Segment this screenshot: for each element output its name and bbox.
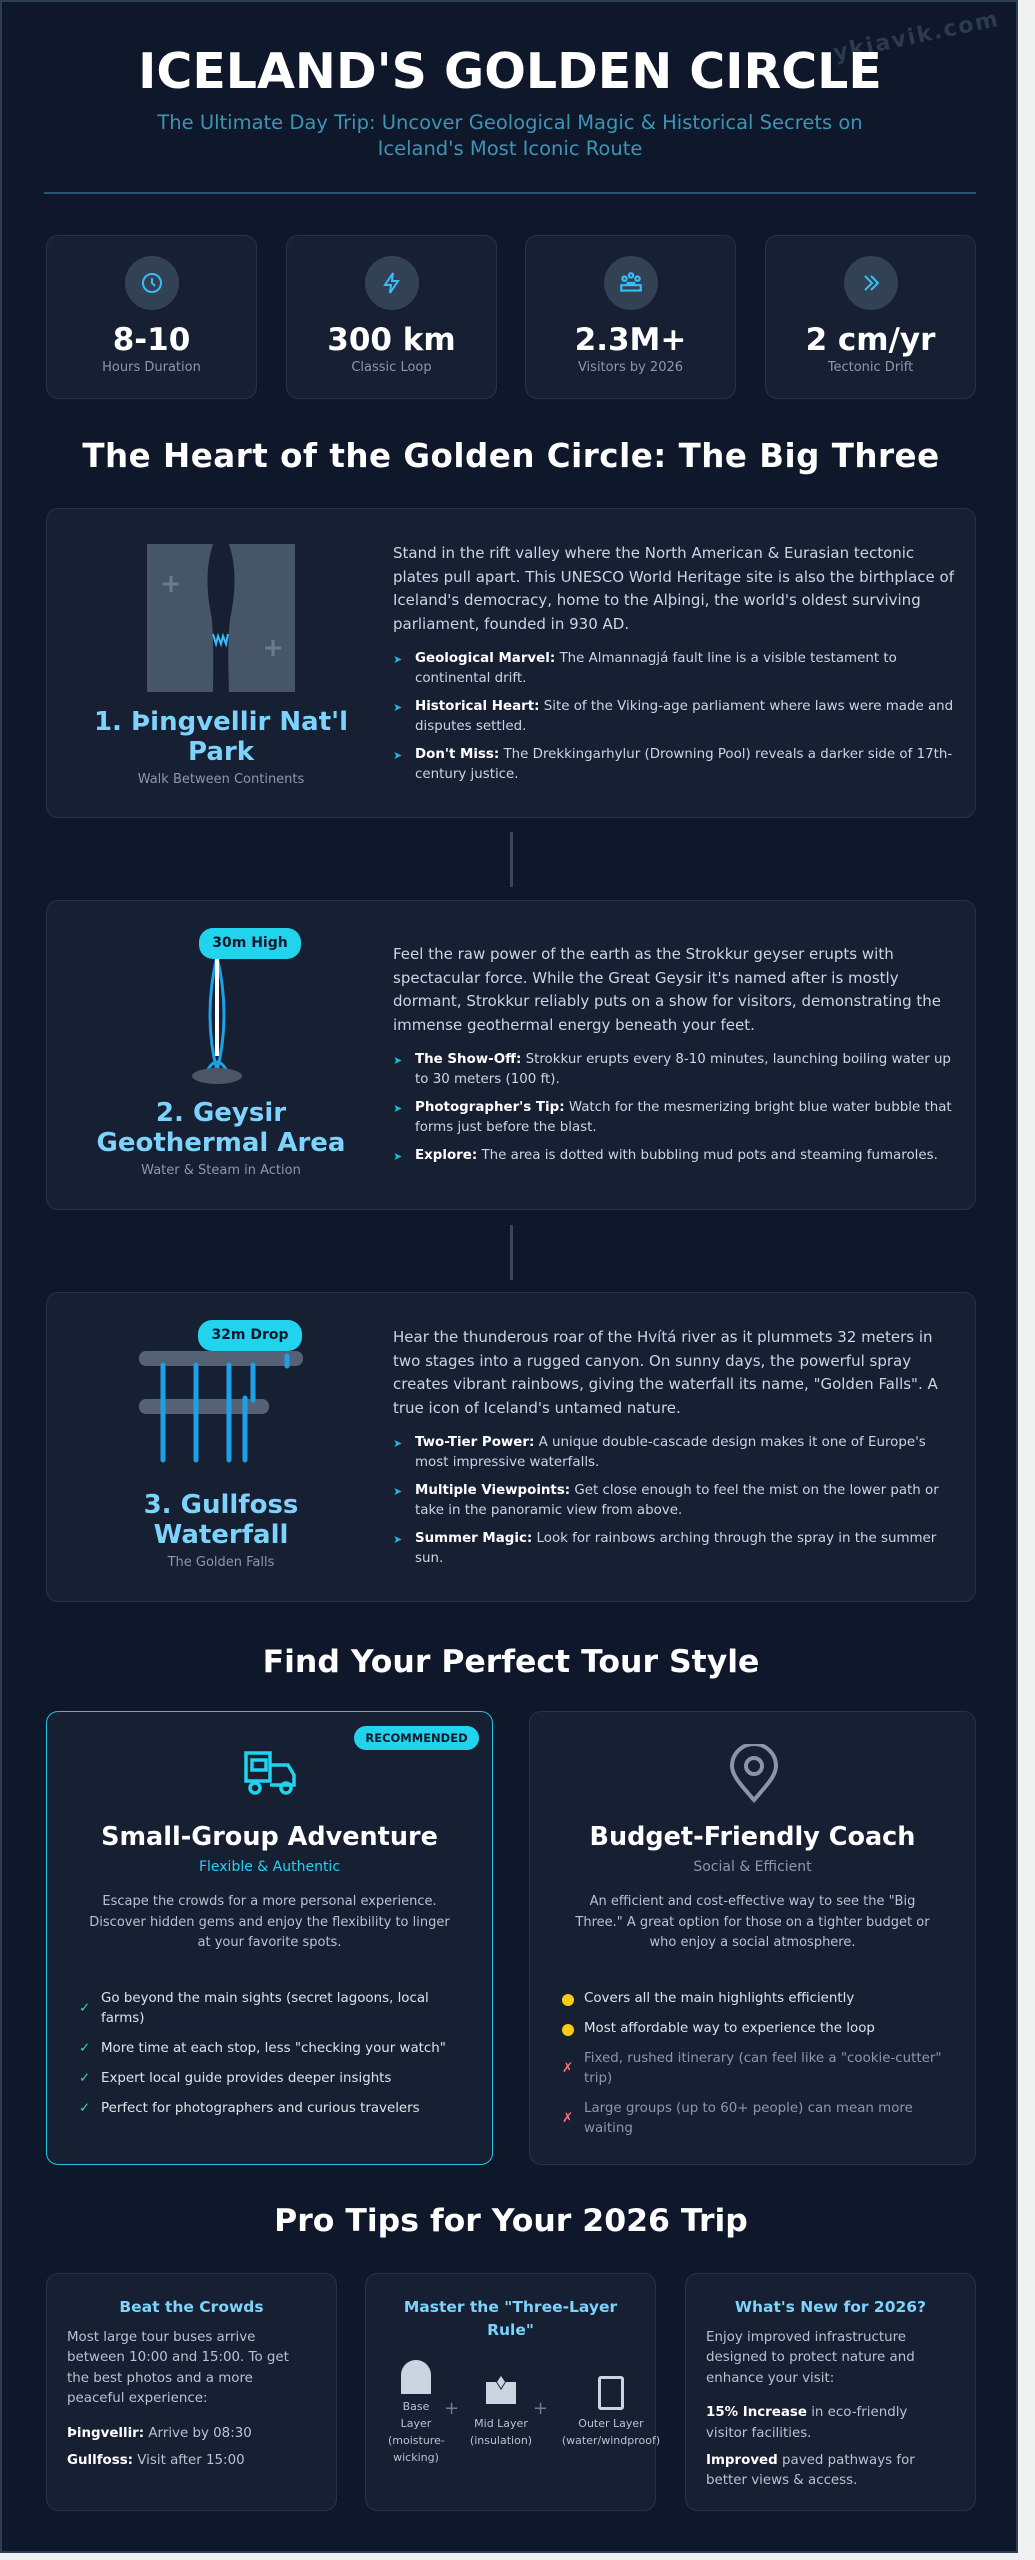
panel: budget coach: Budget-Friendly Coach <box>590 1822 915 1852</box>
panel: three-layer rule: Master the "Three-Layer Rule" <box>404 2298 617 2339</box>
panel: what's new: 15% Increase in eco-friendly visitor facilities. <box>706 2405 907 2441</box>
panel: small-group: ✓ <box>79 2101 90 2116</box>
badge: 30m high <box>199 928 301 959</box>
subtitle: The Ultimate Day Trip: Uncover Geological Magic & Historical Secrets on Iceland's Most Iconic Route <box>157 111 863 160</box>
badge: recommended: RECOMMENDED <box>365 1731 468 1745</box>
stat: visitors <box>525 235 736 399</box>
title: ICELAND'S GOLDEN CIRCLE <box>138 43 882 100</box>
badge: recommended <box>354 1726 479 1750</box>
icon: layers <box>388 2360 660 2464</box>
panel: small-group: Escape the crowds for a more personal experience. Discover hidden gems and enjoy the flexibility to linger at your favorite spots. <box>89 1894 450 1950</box>
text: Don't Miss: The Drekkingarhylur (Drowning Pool) reveals a darker side of 17th-century justice. <box>415 747 952 782</box>
icon: rift <box>147 544 295 692</box>
text: Feel the raw power of the earth as the Strokkur geyser erupts with spectacular force. While the Great Geysir it's named after is mostly dormant, Strokkur reliably puts on a show for visitors, demonstrating the immense geothermal energy beneath your feet. <box>393 945 941 1034</box>
panel: budget coach: Covers all the main highlights efficiently <box>584 1991 854 2006</box>
panel: small-group: ✓ <box>79 2071 90 2086</box>
panel: what's new: What's New for 2026? <box>735 2298 926 2316</box>
title: 2. Geysir Geothermal Area <box>97 1098 345 1158</box>
panel: small-group: More time at each stop, less "checking your watch" <box>101 2041 446 2056</box>
icon: geyser <box>192 959 242 1084</box>
panel: beat the crowds: Beat the Crowds <box>119 2298 264 2316</box>
panel: gullfoss <box>46 1292 976 1602</box>
panel: small-group: ✓ <box>79 2001 90 2016</box>
badge: 32m drop: 32m Drop <box>211 1327 289 1343</box>
icon: vehicles <box>244 1751 296 1795</box>
text: Two-Tier Power: A unique double-cascade design makes it one of Europe's most impressive waterfalls. <box>415 1435 926 1470</box>
panel: beat the crowds: Most large tour buses arrive between 10:00 and 15:00. To get the best photos and a more peaceful experience: <box>67 2330 289 2406</box>
connector <box>510 1225 513 1280</box>
panel: small-group: Go beyond the main sights (secret lagoons, local farms) <box>101 1991 429 2026</box>
panel: small-group: Expert local guide provides deeper insights <box>101 2071 391 2086</box>
stat: distance: 300 km <box>327 322 456 358</box>
text: Multiple Viewpoints: Get close enough to feel the mist on the lower path or take in the panoramic view from above. <box>415 1483 939 1518</box>
heading: pro tips: Pro Tips for Your 2026 Trip <box>274 2203 748 2239</box>
stat: distance: Classic Loop <box>351 360 432 375</box>
panel: beat the crowds: Þingvellir: Arrive by 08:30 <box>67 2426 252 2441</box>
panel: beat the crowds: Gullfoss: Visit after 15:00 <box>67 2453 245 2468</box>
text: Summer Magic: Look for rainbows arching through the spray in the summer sun. <box>415 1531 936 1566</box>
icon: layers: Mid Layer (insulation) <box>470 2417 532 2447</box>
stat: drift <box>765 235 976 399</box>
stat: visitors: 2.3M+ <box>575 322 686 358</box>
text: Geological Marvel: The Almannagjá fault line is a visible testament to continental drift. <box>415 651 897 686</box>
stat: hours: 8-10 <box>113 322 190 358</box>
panel: budget coach <box>529 1711 976 2165</box>
panel: geysir <box>46 900 976 1210</box>
text: The Show-Off: Strokkur erupts every 8-10 minutes, launching boiling water up to 30 meters (100 ft). <box>415 1052 951 1087</box>
stat: hours <box>46 235 257 399</box>
title: The Golden Falls <box>168 1555 274 1570</box>
icon: people <box>604 256 658 310</box>
icon: layers: Outer Layer (water/windproof) <box>562 2417 660 2447</box>
watermark: ykjavik.com <box>831 7 1002 66</box>
icon: layers: + <box>444 2398 459 2419</box>
text: Explore: The area is dotted with bubbling mud pots and steaming fumaroles. <box>415 1148 938 1163</box>
panel: small-group: Flexible & Authentic <box>199 1859 340 1875</box>
panel: what's new <box>685 2273 976 2511</box>
icon: waterfall <box>139 1351 303 1462</box>
heading: tour style: Find Your Perfect Tour Style <box>263 1644 759 1680</box>
title: Water & Steam in Action <box>141 1163 301 1178</box>
stat: drift: Tectonic Drift <box>828 360 913 375</box>
connector <box>510 832 513 887</box>
panel: budget coach: Social & Efficient <box>693 1859 812 1875</box>
icon: layers: + <box>533 2398 548 2419</box>
panel: what's new: Enjoy improved infrastructure designed to protect nature and enhance your visit: <box>706 2330 915 2386</box>
stat: drift: 2 cm/yr <box>806 322 935 358</box>
stat: distance <box>286 235 497 399</box>
text <box>393 544 954 782</box>
stat: visitors: Visitors by 2026 <box>578 360 683 375</box>
heading: big three: The Heart of the Golden Circle: The Big Three <box>82 437 940 475</box>
panel: budget coach: ✗ <box>562 2061 573 2076</box>
title: Walk Between Continents <box>138 772 304 787</box>
text: Hear the thunderous roar of the Hvítá river as it plummets 32 meters in two stages into a rugged canyon. On sunny days, the powerful spray creates vibrant rainbows, giving the waterfall its name, "Golden Falls". A true icon of Iceland's untamed nature. <box>393 1328 938 1417</box>
panel: budget coach: ✗ <box>562 2111 573 2126</box>
panel: small-group: Small-Group Adventure <box>101 1822 438 1852</box>
title: 1. Þingvellir Nat'l Park <box>94 707 348 767</box>
panel: budget coach: An efficient and cost-effective way to see the "Big Three." A great option for those on a tighter budget or who enjoy a social atmosphere. <box>575 1894 930 1950</box>
icon: map pin <box>730 1744 778 1803</box>
panel: what's new: Improved paved pathways for better views & access. <box>706 2453 915 2488</box>
badge: 32m drop <box>198 1320 302 1351</box>
panel: budget coach: Most affordable way to experience the loop <box>584 2021 875 2036</box>
text <box>393 1328 939 1566</box>
text: Historical Heart: Site of the Viking-age parliament where laws were made and disputes settled. <box>415 699 953 734</box>
panel: small-group: Perfect for photographers and curious travelers <box>101 2101 420 2116</box>
icon: clock <box>125 256 179 310</box>
badge: 30m high: 30m High <box>212 935 288 951</box>
panel: beat the crowds <box>46 2273 337 2511</box>
panel: small-group: ✓ <box>79 2041 90 2056</box>
panel: budget coach: Large groups (up to 60+ people) can mean more waiting <box>584 2101 913 2136</box>
text: Stand in the rift valley where the North American & Eurasian tectonic plates pull apart. This UNESCO World Heritage site is also the birthplace of Iceland's democracy, home to the Alþingi, the world's oldest surviving parliament, founded in 930 AD. <box>393 544 954 633</box>
panel: three-layer rule <box>365 2273 656 2511</box>
stat: hours: Hours Duration <box>102 360 201 375</box>
text: Photographer's Tip: Watch for the mesmerizing bright blue water bubble that forms just before the blast. <box>415 1100 952 1135</box>
icon: layers: Base Layer (moisture-wicking) <box>388 2400 445 2464</box>
title: 3. Gullfoss Waterfall <box>144 1490 298 1550</box>
icon: bolt <box>365 256 419 310</box>
panel: thingvellir <box>46 508 976 818</box>
panel: budget coach: Fixed, rushed itinerary (can feel like a "cookie-cutter" trip) <box>584 2051 942 2086</box>
text <box>393 945 952 1163</box>
icon: chevrons <box>844 256 898 310</box>
panel: small-group <box>46 1711 493 2165</box>
